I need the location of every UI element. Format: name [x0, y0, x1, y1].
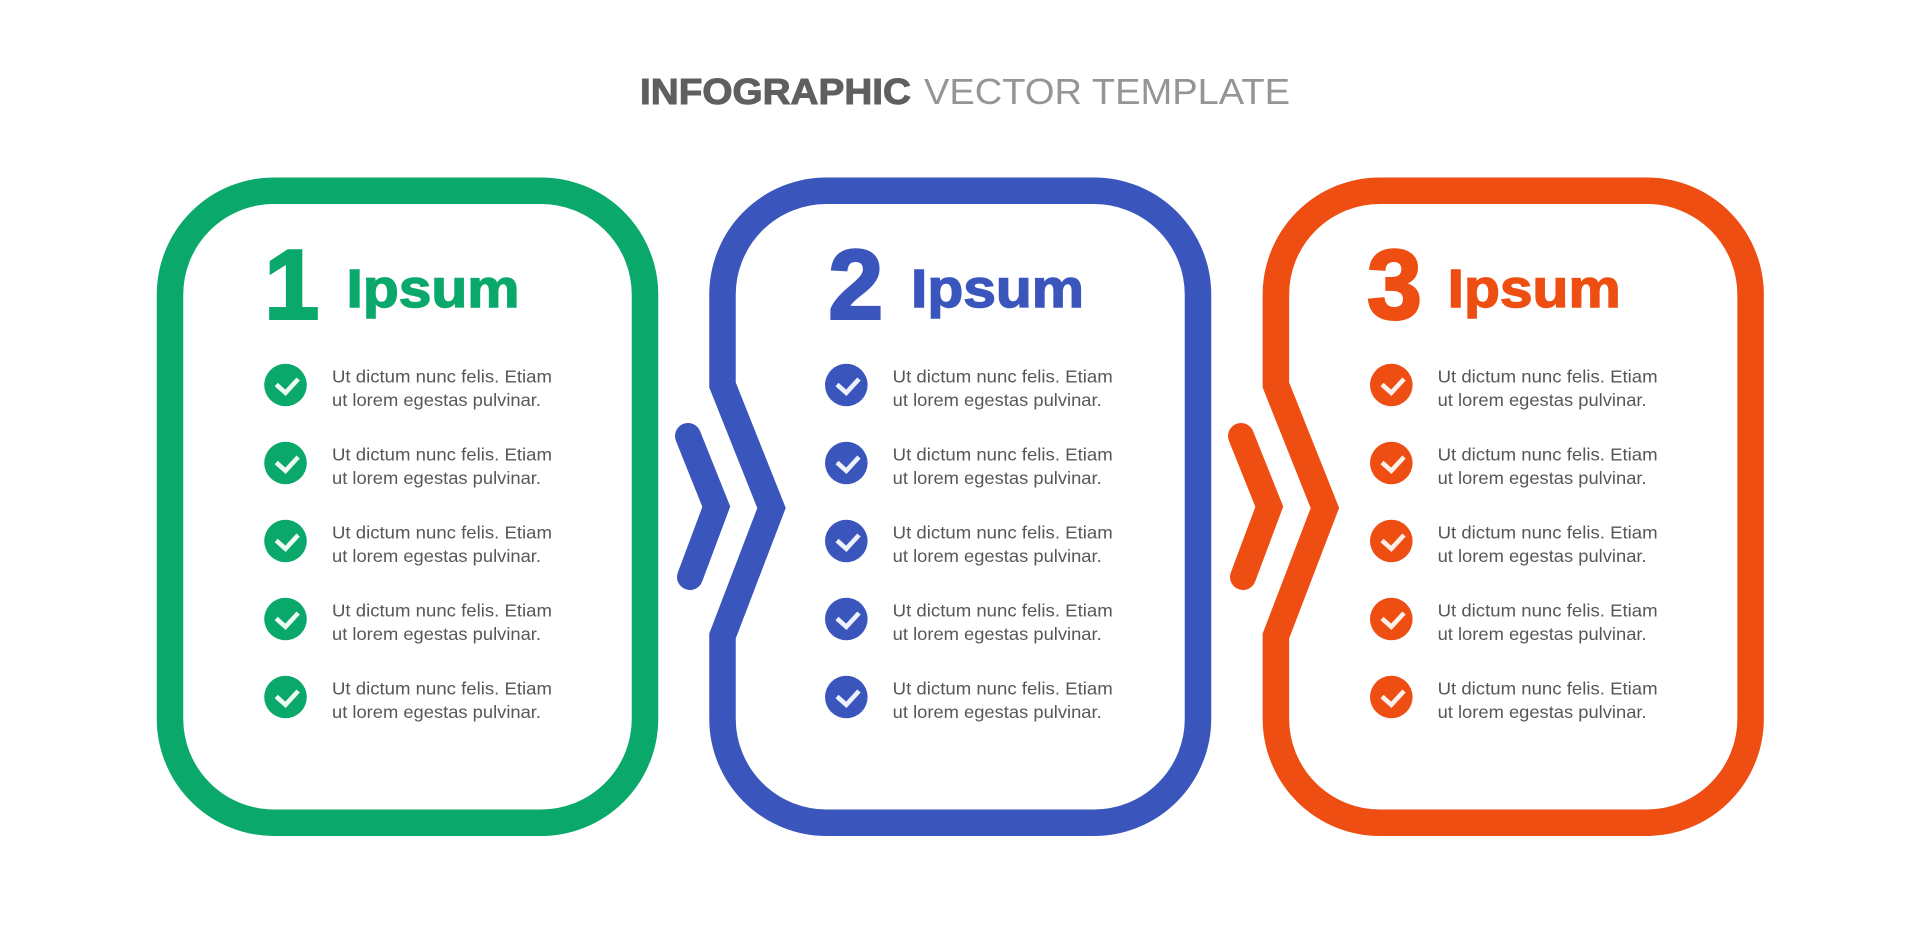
- arrow: blue chevron: [688, 436, 716, 577]
- icon: check: [825, 442, 868, 484]
- text: item 4: Ut dictum nunc felis. Etiam: [893, 601, 1113, 621]
- heading: 2 Ipsum: Ipsum: [911, 259, 1084, 319]
- heading: 3 Ipsum: [1367, 230, 1621, 340]
- text: item 4: ut lorem egestas pulvinar.: [332, 624, 541, 644]
- text: item 5: ut lorem egestas pulvinar.: [1438, 702, 1647, 722]
- text: item 3: ut lorem egestas pulvinar.: [1438, 546, 1647, 566]
- text: item 1: Ut dictum nunc felis. Etiam: [893, 367, 1113, 387]
- text: item 4: [332, 601, 552, 644]
- text: item 3: [893, 523, 1113, 566]
- icon: check: [264, 364, 307, 406]
- icon: check: [825, 598, 868, 640]
- text: item 5: Ut dictum nunc felis. Etiam: [893, 679, 1113, 699]
- icon: check: [1370, 442, 1413, 484]
- panel outline: orange frame with arrow notch: [1276, 191, 1751, 823]
- text: item 5: ut lorem egestas pulvinar.: [332, 702, 541, 722]
- text: item 3: [332, 523, 552, 566]
- text: item 5: Ut dictum nunc felis. Etiam: [1438, 679, 1658, 699]
- list: five check items: [1370, 364, 1658, 722]
- text: item 1: [332, 367, 552, 410]
- heading: 3 Ipsum: 3: [1367, 230, 1422, 340]
- heading: 3 Ipsum: Ipsum: [1448, 259, 1621, 319]
- heading: 1 Ipsum: 1: [264, 230, 319, 340]
- arrow: orange chevron: [1241, 436, 1269, 577]
- list: five check items: [264, 364, 552, 722]
- text: item 4: Ut dictum nunc felis. Etiam: [1438, 601, 1658, 621]
- text: item 2: [332, 445, 552, 488]
- heading: 2 Ipsum: [828, 230, 1084, 340]
- text: item 2: Ut dictum nunc felis. Etiam: [332, 445, 552, 465]
- icon: check: [264, 598, 307, 640]
- icon: check: [1370, 676, 1413, 718]
- text: item 1: Ut dictum nunc felis. Etiam: [332, 367, 552, 387]
- text: item 4: [893, 601, 1113, 644]
- icon: check: [825, 676, 868, 718]
- text: item 2: ut lorem egestas pulvinar.: [893, 468, 1102, 488]
- text: item 1: ut lorem egestas pulvinar.: [1438, 390, 1647, 410]
- text: item 5: [332, 679, 552, 722]
- icon: check: [264, 442, 307, 484]
- text: item 2: [1438, 445, 1658, 488]
- heading: 1 Ipsum: [264, 230, 520, 340]
- text: item 1: [1438, 367, 1658, 410]
- text: item 1: [893, 367, 1113, 410]
- icon: check: [1370, 520, 1413, 562]
- title: VECTOR TEMPLATE: [924, 71, 1290, 112]
- title: INFOGRAPHIC: [640, 71, 911, 112]
- icon: check: [825, 520, 868, 562]
- panel: step 3 (orange): [1276, 191, 1751, 823]
- title: [640, 71, 1290, 112]
- text: item 4: ut lorem egestas pulvinar.: [1438, 624, 1647, 644]
- text: item 1: ut lorem egestas pulvinar.: [893, 390, 1102, 410]
- text: item 4: [1438, 601, 1658, 644]
- panel: step 1 (green): [170, 191, 645, 823]
- heading: 2 Ipsum: 2: [828, 230, 883, 340]
- panel: step 2 (blue): [722, 191, 1198, 823]
- text: item 3: Ut dictum nunc felis. Etiam: [332, 523, 552, 543]
- text: item 3: [1438, 523, 1658, 566]
- list: five check items: [825, 364, 1113, 722]
- panel outline: green rounded frame: [170, 191, 645, 823]
- icon: check: [264, 676, 307, 718]
- heading: 1 Ipsum: Ipsum: [346, 259, 520, 319]
- icon: check: [264, 520, 307, 562]
- text: item 2: ut lorem egestas pulvinar.: [332, 468, 541, 488]
- text: item 5: [1438, 679, 1658, 722]
- text: item 2: ut lorem egestas pulvinar.: [1438, 468, 1647, 488]
- icon: check: [825, 364, 868, 406]
- text: item 1: ut lorem egestas pulvinar.: [332, 390, 541, 410]
- panel outline: blue frame with arrow notch: [722, 191, 1198, 823]
- text: item 2: [893, 445, 1113, 488]
- text: item 4: ut lorem egestas pulvinar.: [893, 624, 1102, 644]
- text: item 3: ut lorem egestas pulvinar.: [893, 546, 1102, 566]
- text: item 3: Ut dictum nunc felis. Etiam: [893, 523, 1113, 543]
- text: item 4: Ut dictum nunc felis. Etiam: [332, 601, 552, 621]
- icon: check: [1370, 598, 1413, 640]
- text: item 5: Ut dictum nunc felis. Etiam: [332, 679, 552, 699]
- icon: check: [1370, 364, 1413, 406]
- text: item 5: [893, 679, 1113, 722]
- text: item 5: ut lorem egestas pulvinar.: [893, 702, 1102, 722]
- text: item 2: Ut dictum nunc felis. Etiam: [893, 445, 1113, 465]
- text: item 3: Ut dictum nunc felis. Etiam: [1438, 523, 1658, 543]
- text: item 1: Ut dictum nunc felis. Etiam: [1438, 367, 1658, 387]
- text: item 2: Ut dictum nunc felis. Etiam: [1438, 445, 1658, 465]
- text: item 3: ut lorem egestas pulvinar.: [332, 546, 541, 566]
